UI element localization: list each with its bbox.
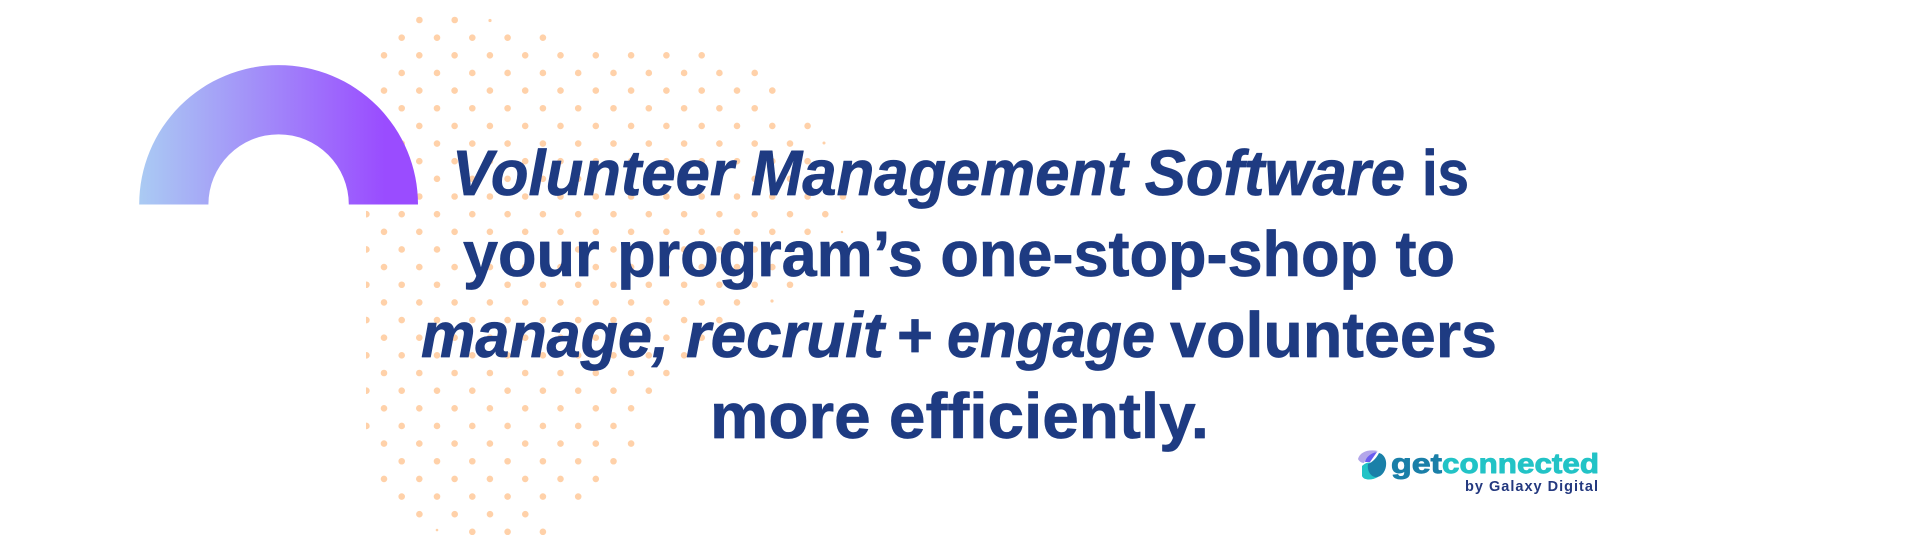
- logo wordmark: get: [1391, 448, 1442, 479]
- headline statement: manage,: [421, 299, 669, 371]
- getconnected logo: connected: [1442, 448, 1599, 479]
- getconnected logo: [1358, 448, 1599, 495]
- dotted orange background blob: [366, 19, 843, 532]
- headline statement: is: [1422, 137, 1469, 209]
- headline statement: more efficiently.: [710, 380, 1209, 452]
- headline statement: recruit: [686, 299, 887, 371]
- icon: logo mark: [1358, 450, 1386, 480]
- headline statement: +: [897, 299, 933, 371]
- logo byline: by Galaxy Digital: [1465, 479, 1598, 495]
- headline statement: your program’s one-stop-shop to: [463, 218, 1455, 290]
- headline statement: volunteers: [1170, 299, 1497, 371]
- gradient half-ring arch: [139, 65, 418, 205]
- headline statement: Volunteer Management Software: [452, 137, 1405, 209]
- headline statement: [421, 137, 1497, 452]
- headline statement: engage: [947, 299, 1155, 371]
